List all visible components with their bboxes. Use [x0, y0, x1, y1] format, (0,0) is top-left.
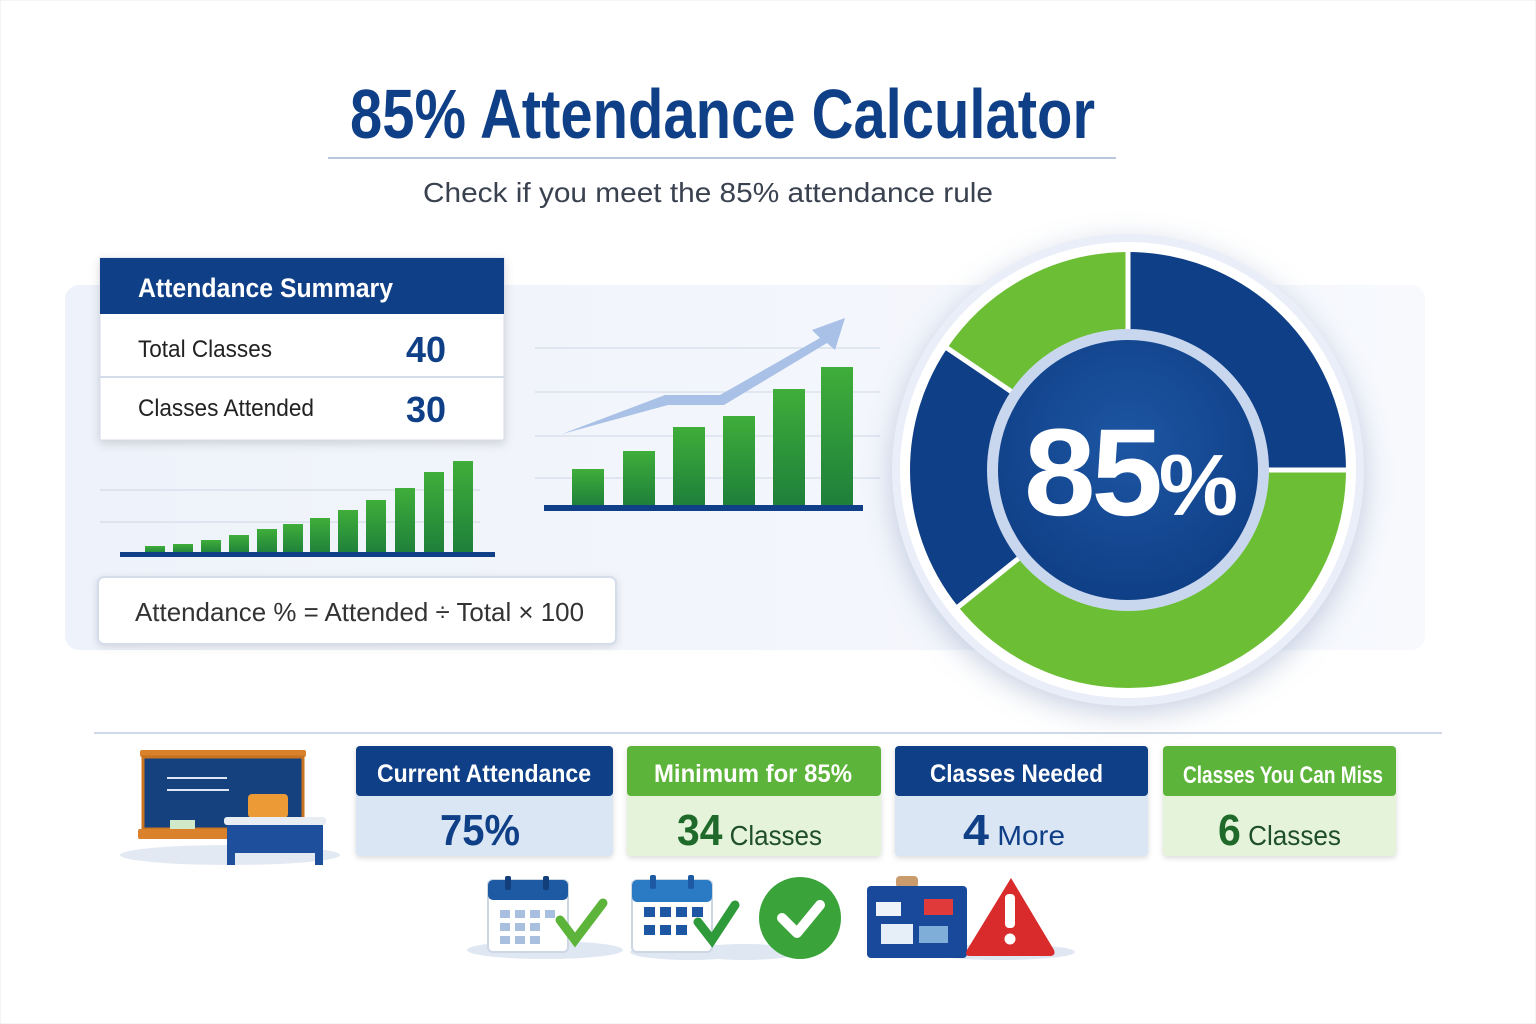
icon row	[467, 875, 1075, 960]
card: minimum for 85%	[627, 746, 881, 856]
card: current attendance	[356, 746, 613, 856]
card: minimum for 85%: Minimum for 85%	[654, 760, 852, 788]
growth bar chart with arrow	[535, 318, 880, 511]
icon: chalkboard and desk	[120, 750, 340, 865]
card: classes needed: Classes Needed	[930, 760, 1103, 788]
donut chart 85%: 85%	[1024, 404, 1237, 542]
card: classes you can miss: Classes You Can Miss	[1183, 762, 1383, 789]
card: classes needed: 4 More	[963, 806, 1065, 855]
formula box	[98, 577, 616, 644]
panel: attendance summary: 40	[406, 329, 446, 370]
icon: calendar check 1	[488, 876, 603, 952]
card: classes you can miss	[1163, 746, 1396, 856]
panel: attendance summary: Total Classes	[138, 336, 272, 363]
panel: attendance summary	[100, 258, 504, 440]
subtitle: Check if you meet the 85% attendance rule	[423, 177, 993, 208]
panel: attendance summary: 30	[406, 389, 446, 430]
icon: blue board	[867, 876, 967, 958]
background panel	[65, 285, 1425, 650]
title: 85% Attendance Calculator	[350, 75, 1095, 153]
icon: warning triangle	[966, 878, 1054, 956]
card: classes you can miss: 6 Classes	[1218, 806, 1341, 855]
donut chart 85%	[892, 234, 1364, 706]
formula box: Attendance % = Attended ÷ Total × 100	[135, 597, 584, 627]
panel: attendance summary: Attendance Summary	[138, 273, 393, 303]
small bar chart	[100, 461, 495, 557]
card: minimum for 85%: 34 Classes	[677, 806, 822, 855]
card: classes needed	[895, 746, 1148, 856]
icon: calendar check 2	[632, 875, 735, 952]
card: current attendance: Current Attendance	[377, 760, 591, 788]
panel: attendance summary: Classes Attended	[138, 395, 314, 422]
card: current attendance: 75%	[440, 806, 520, 855]
icon: green check circle	[759, 877, 841, 959]
